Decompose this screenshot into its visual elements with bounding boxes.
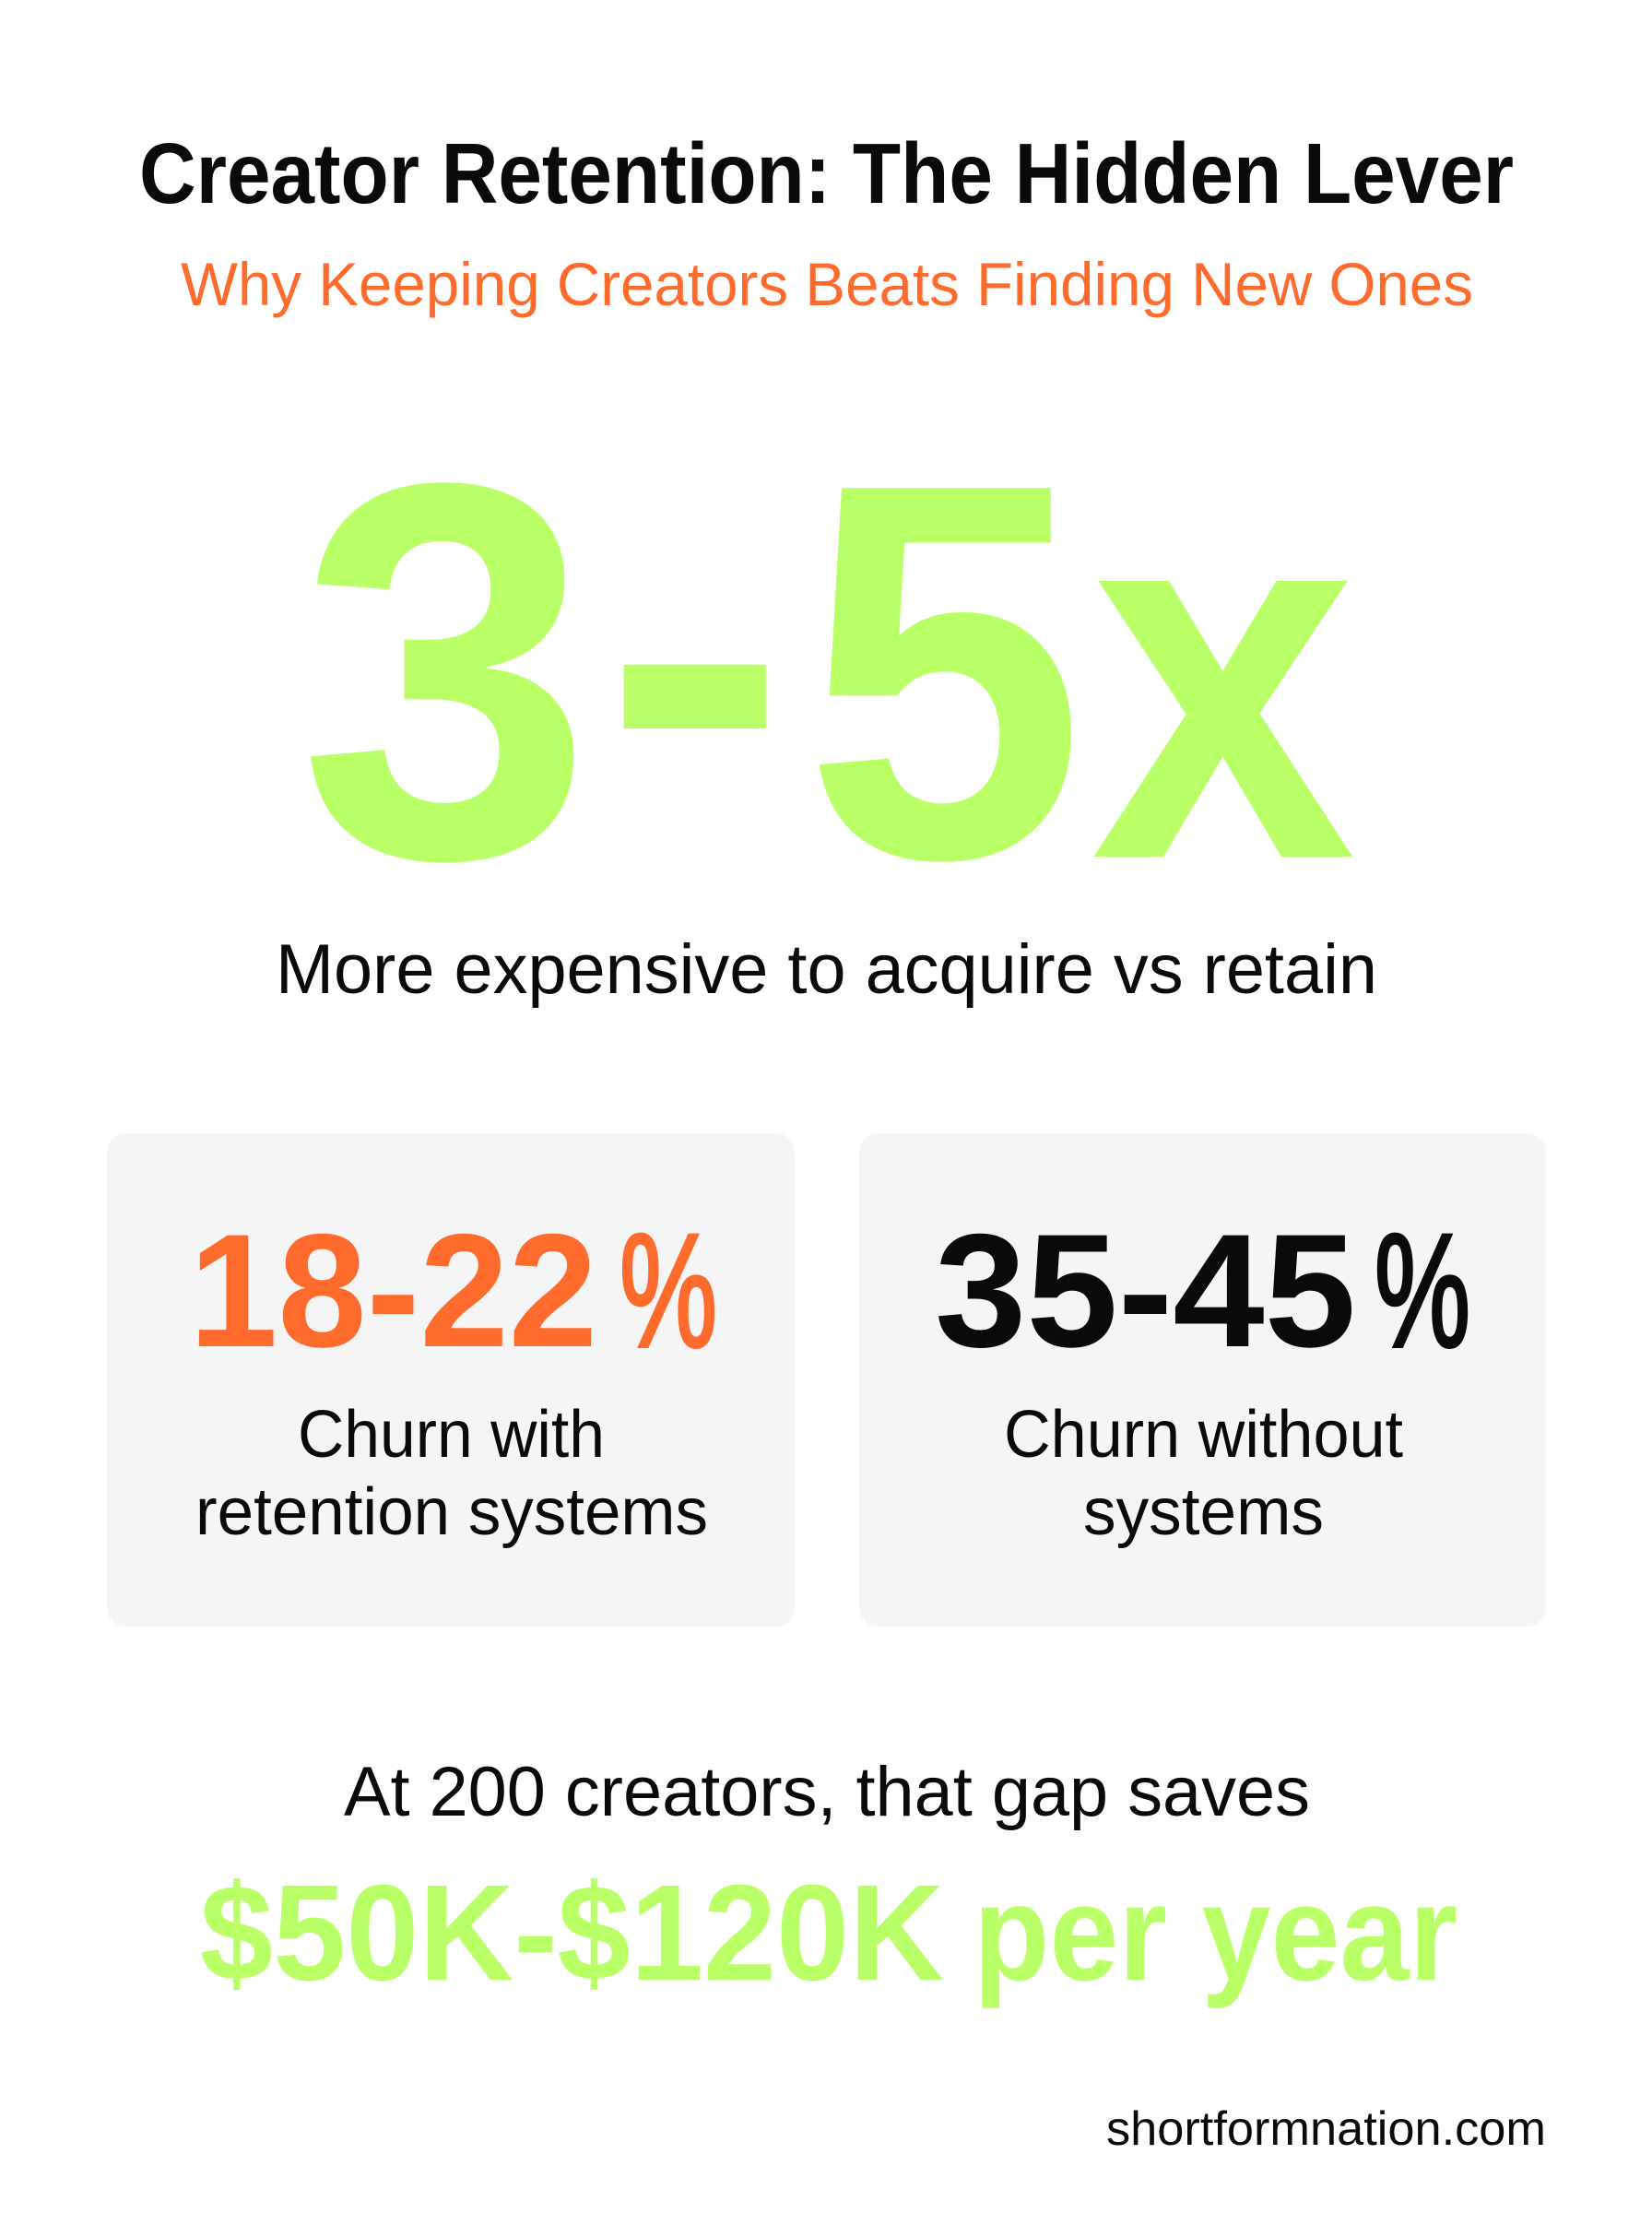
label: churn without: Churn without: [1004, 1398, 1403, 1472]
panel: churn with retention systems: [107, 1133, 795, 1627]
source url: shortformnation.com: [1106, 2102, 1546, 2156]
savings lead-in: At 200 creators, that gap saves: [344, 1753, 1310, 1831]
label: systems: systems: [1083, 1475, 1324, 1549]
stat: 18-22%: 18-22: [189, 1201, 597, 1381]
savings figure: $50K-$120K: [200, 1857, 944, 2009]
stat: 35-45%: %: [1375, 1201, 1470, 1381]
title: Creator Retention: The Hidden Lever: [139, 125, 1514, 221]
hero stat: 3-5x: -: [602, 351, 788, 950]
subtitle: Why Keeping Creators Beats Finding New Ones: [181, 250, 1473, 318]
hero stat: 3-5x: [299, 351, 1359, 971]
label: churn with: Churn with: [298, 1398, 605, 1472]
savings figure: per year: [974, 1857, 1457, 2009]
panel background right: [859, 1133, 1546, 1627]
panel: churn without systems: [859, 1133, 1546, 1627]
hero caption: More expensive to acquire vs retain: [276, 930, 1377, 1009]
panel background left: [107, 1133, 795, 1627]
hero stat: 3-5x: 5: [804, 373, 1085, 971]
stat: 35-45%: 35-45: [935, 1201, 1356, 1381]
label: retention systems: retention systems: [195, 1475, 708, 1549]
savings figure: [200, 1857, 1457, 2009]
hero stat: 3-5x: x: [1091, 385, 1359, 967]
stat: 18-22%: %: [620, 1201, 717, 1381]
hero stat: 3-5x: 3: [299, 373, 593, 971]
